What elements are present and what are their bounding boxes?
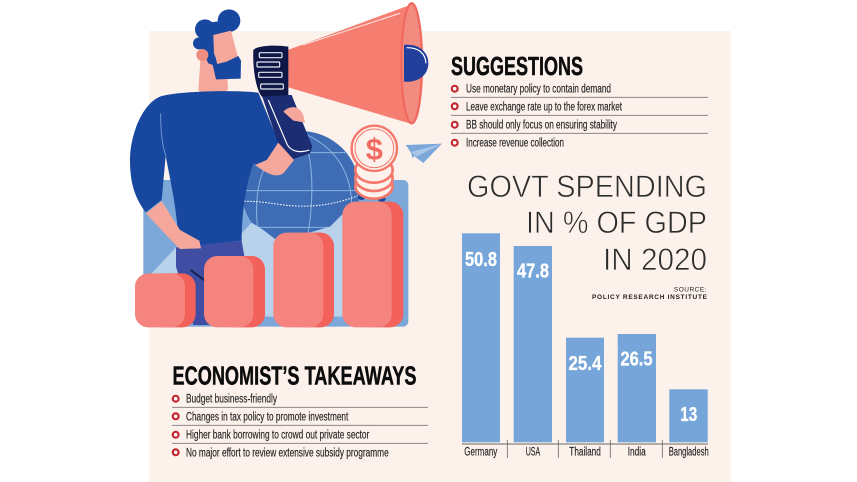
bar: Bangladesh xyxy=(669,389,708,442)
chart title: IN 2020 xyxy=(603,241,707,277)
bar: Thailand: 25.4 xyxy=(568,353,602,375)
bullet item 1: Budget business-friendly xyxy=(186,394,277,406)
megaphone handle xyxy=(262,95,312,159)
left forearm xyxy=(146,201,201,249)
megaphone xyxy=(253,3,428,159)
hands xyxy=(255,107,305,175)
bullet item 2 xyxy=(452,102,623,114)
bullet item 1: Use monetary policy to contain demand xyxy=(466,84,611,96)
bullet item 4 xyxy=(452,138,564,150)
bullet item 4 xyxy=(173,448,389,460)
heading: economist's takeaways: ECONOMIST’S TAKEAWAYS xyxy=(172,360,416,390)
axis labels: Germany xyxy=(464,447,497,459)
bullet item 3 xyxy=(173,430,369,442)
source: SOURCE: xyxy=(674,287,707,294)
bar: USA xyxy=(514,246,552,442)
bullet item 3: Higher bank borrowing to crowd out private sector xyxy=(186,430,369,442)
chart title: IN % OF GDP xyxy=(526,204,707,240)
axis labels: Thailand xyxy=(569,447,601,459)
icon: paper plane xyxy=(406,144,442,163)
axis labels: USA xyxy=(526,447,540,459)
bullet item 2 xyxy=(173,412,349,424)
axis labels: Bangladesh xyxy=(669,447,709,459)
axis labels xyxy=(464,447,709,459)
trousers xyxy=(176,241,245,325)
axis labels: India xyxy=(628,447,646,459)
bullet item 2: Leave exchange rate up to the forex market xyxy=(466,102,623,114)
bullet item 4: No major effort to review extensive subsidy programme xyxy=(186,448,389,460)
heading: suggestions: SUGGESTIONS xyxy=(451,51,583,81)
bar: Thailand xyxy=(566,338,604,442)
man xyxy=(130,9,278,325)
source: POLICY RESEARCH INSTITUTE xyxy=(592,294,708,301)
face xyxy=(213,31,238,65)
bullet item 4: Increase revenue collection xyxy=(466,138,564,150)
bar: Germany: 50.8 xyxy=(465,249,497,271)
coin stack xyxy=(352,126,397,202)
bullet item 1 xyxy=(452,84,611,96)
bullet item 1 xyxy=(173,394,277,406)
chart title: GOVT SPENDING xyxy=(467,168,707,204)
bar: India: 26.5 xyxy=(620,349,652,371)
light area chart xyxy=(152,213,343,317)
bullet item 2: Changes in tax policy to promote investment xyxy=(186,412,349,424)
bar: Germany xyxy=(462,233,500,442)
list: takeaways xyxy=(172,394,428,460)
globe xyxy=(242,131,360,249)
bars xyxy=(135,202,403,327)
background panel xyxy=(149,31,731,482)
illustration: man with megaphone and growth bars xyxy=(130,3,442,327)
sweater xyxy=(130,91,278,247)
bar chart: govt spending xyxy=(462,233,709,459)
list: suggestions xyxy=(451,84,708,150)
chart backdrop xyxy=(143,180,408,327)
bar: USA: 47.8 xyxy=(517,261,549,283)
megaphone grip xyxy=(253,46,288,97)
neck xyxy=(198,57,228,96)
bar: India xyxy=(618,334,656,442)
source xyxy=(592,287,708,301)
bar: Bangladesh: 13 xyxy=(680,404,697,426)
chart title xyxy=(467,168,707,277)
bullet item 3: BB should only focus on ensuring stability xyxy=(466,120,617,132)
bullet item 3 xyxy=(452,120,617,132)
coin stack: $ xyxy=(366,132,383,166)
hair xyxy=(193,9,240,67)
beard xyxy=(209,50,241,79)
